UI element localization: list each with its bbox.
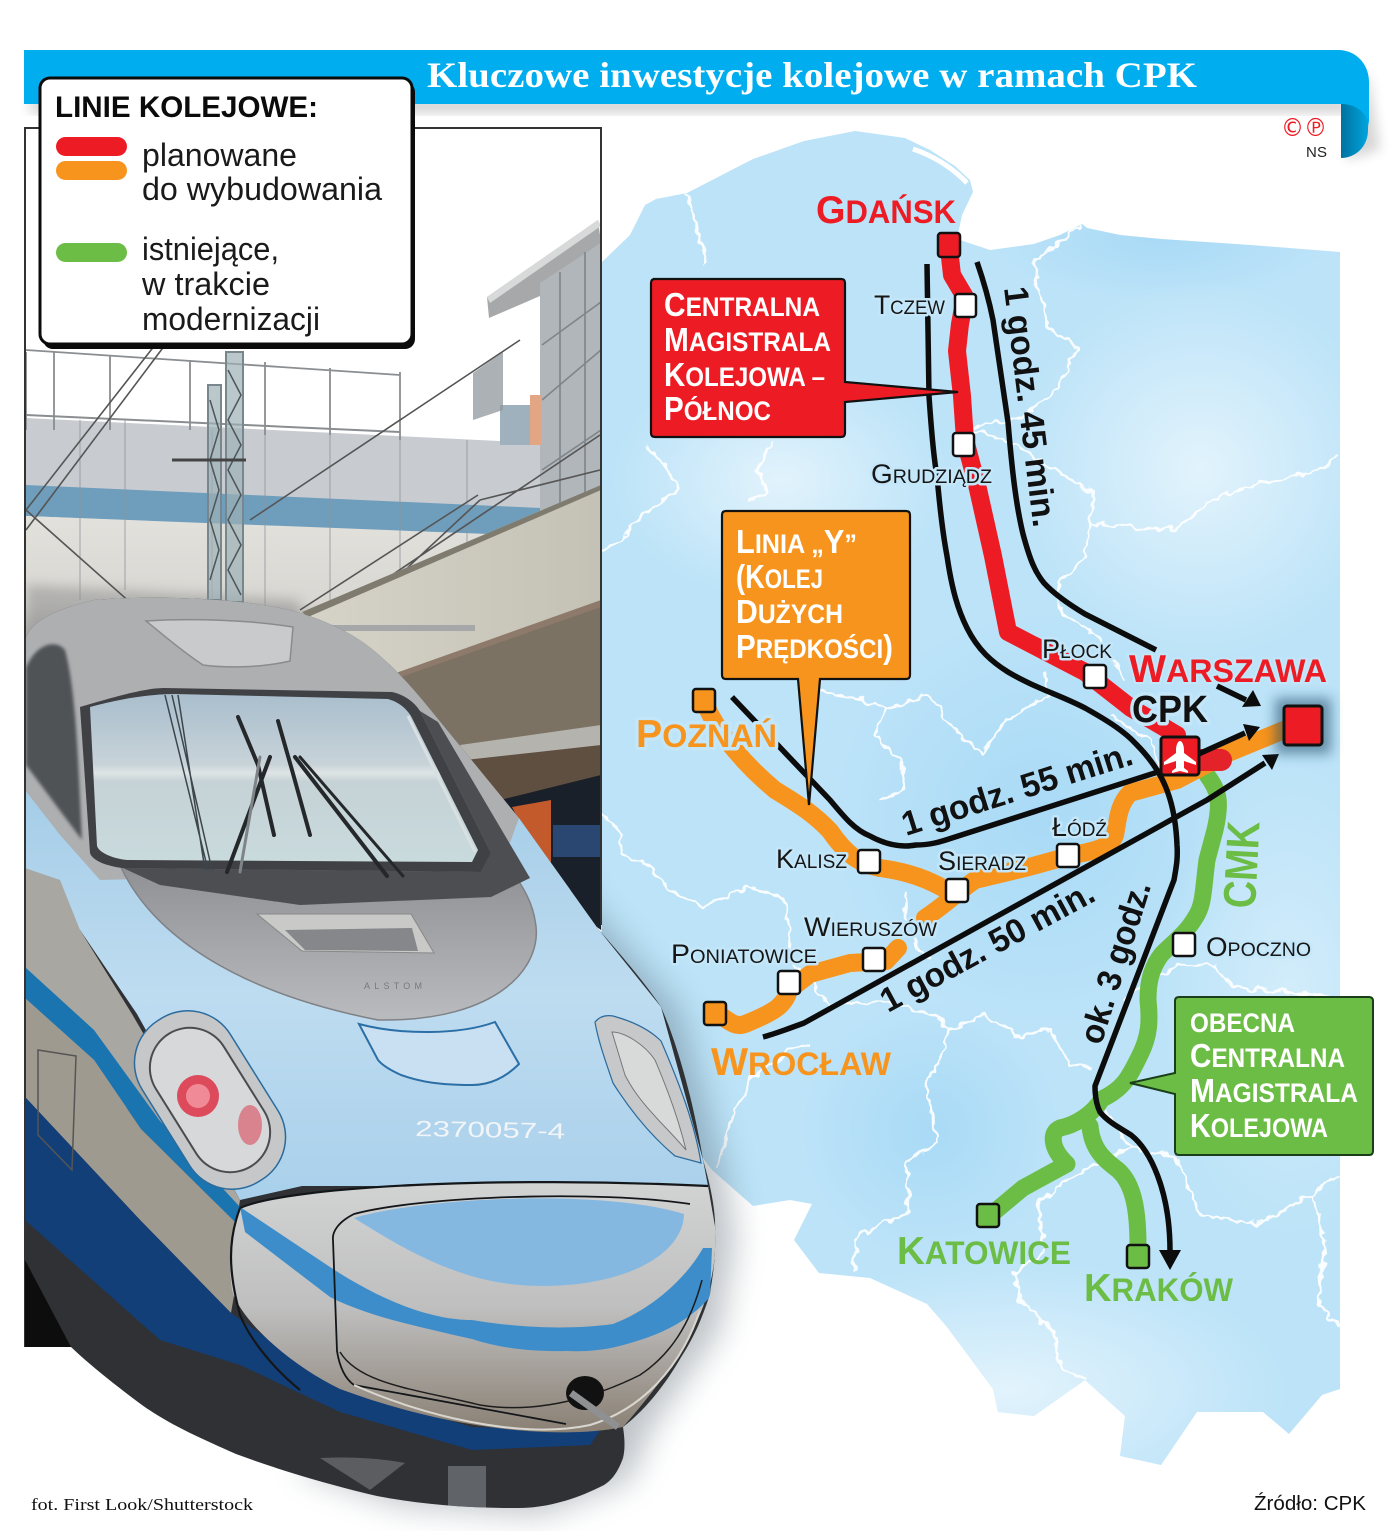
grey mask — [120, 850, 536, 1020]
number: 2370057-4 — [415, 1116, 565, 1144]
station: Płock — [1084, 665, 1106, 688]
callout: Centralna Magistrala Kolejowa - Północ: KOLEJOWA – — [664, 356, 825, 393]
station: Łódź — [1057, 844, 1079, 867]
station labels: Opoczno — [1206, 932, 1311, 962]
orange line Y — [708, 710, 1284, 1025]
swatch: green — [56, 243, 127, 262]
travel time: 1 godz. 50 min.: 1 godz. 50 min. — [874, 873, 1101, 1020]
city label: Wrocław: WROCŁAW — [711, 1041, 892, 1084]
red line CMK north — [949, 248, 1177, 735]
source: Źródło: CPK — [1254, 1492, 1367, 1515]
city label: Gdańsk: GDAŃSK — [816, 189, 956, 232]
callout: obecna Centralna Magistrala Kolejowa: CENTRALNA — [1190, 1037, 1345, 1074]
photo frame — [25, 128, 601, 1347]
photo credit: fot. First Look/Shutterstock — [31, 1495, 254, 1514]
station labels: Tczew — [874, 290, 945, 320]
city label: Kraków: KRAKÓW — [1084, 1267, 1234, 1310]
legend text: existing: istniejące, — [142, 231, 279, 267]
station: Wieruszów — [863, 948, 885, 971]
train — [20, 590, 716, 1508]
wipers — [227, 717, 403, 876]
map of Poland — [602, 131, 1340, 1465]
red stub past CPK — [1190, 749, 1232, 771]
callout: Centralna Magistrala Kolejowa - Północ: PÓŁNOC — [664, 390, 771, 427]
copyright marks: NS — [1306, 144, 1327, 161]
station: Tczew — [955, 294, 976, 317]
station labels: Poniatowice — [671, 939, 817, 969]
callout: Centralna Magistrala Kolejowa - Północ: MAGISTRALA — [664, 321, 831, 358]
callout: Linia Y: LINIA „Y” — [736, 523, 857, 560]
copyright marks — [1281, 113, 1327, 161]
callout: obecna Centralna Magistrala Kolejowa: MAGISTRALA — [1190, 1072, 1358, 1109]
callout: Centralna Magistrala Kolejowa - Północ — [651, 279, 958, 437]
legend text: existing — [141, 231, 320, 337]
legend panel — [40, 78, 415, 349]
windshield — [90, 694, 478, 862]
copyright marks: ©℗ — [1281, 113, 1327, 142]
callout: Centralna Magistrala Kolejowa - Północ: CENTRALNA — [664, 286, 820, 323]
station: Wrocław — [704, 1002, 726, 1025]
access hatch — [359, 1022, 519, 1085]
station: Warszawa with glow — [1275, 698, 1331, 754]
station: Poznań — [693, 689, 715, 712]
pylon — [172, 352, 246, 602]
legend text: planned: planowane — [142, 137, 297, 173]
station: Grudziądz — [953, 433, 974, 456]
station: Gdańsk — [938, 233, 960, 257]
skirt highlights — [320, 1457, 405, 1490]
travel time: ok. 3 godz.: ok. 3 godz. — [1072, 877, 1159, 1048]
travel route: Wrocław to Warszawa — [763, 754, 1279, 1037]
callout: Linia Y: (KOLEJ — [736, 558, 823, 595]
lamps — [134, 1010, 286, 1190]
legend text: planned: do wybudowania — [142, 171, 382, 207]
callout: Linia Y: PRĘDKOŚCI) — [736, 628, 893, 665]
dark band and pillar — [123, 711, 530, 905]
nose cap — [230, 1182, 716, 1432]
photo background: station — [26, 220, 601, 932]
legend text: planned — [142, 137, 382, 207]
legend text: existing: modernizacji — [142, 301, 320, 337]
callout: obecna Centralna Magistrala Kolejowa: OBECNA — [1190, 1008, 1295, 1038]
station labels: Łódź — [1052, 812, 1107, 842]
travel route: Gdańsk west line to Kraków — [927, 264, 1181, 1270]
station: Kalisz — [858, 850, 880, 873]
travel route: Gdańsk east line to Warszawa — [977, 262, 1261, 707]
callout: Linia Y — [722, 511, 910, 805]
title: Kluczowe inwestycje kolejowe w ramach CPK — [427, 55, 1197, 95]
hood body — [25, 790, 708, 1200]
station: Poniatowice — [778, 971, 800, 994]
green line CMK — [993, 775, 1218, 1246]
station: Kraków — [1127, 1245, 1149, 1268]
label: CPK: CPK — [1132, 689, 1209, 731]
train shadow — [300, 820, 735, 1515]
travel time: 1 godz. 55 min.: 1 godz. 55 min. — [897, 735, 1137, 844]
station labels: Płock — [1042, 634, 1112, 664]
station labels: Wieruszów — [804, 912, 937, 942]
label: CMK: CMK — [1213, 820, 1270, 910]
travel route: Poznań to Warszawa — [732, 697, 1260, 846]
city label: Katowice: KATOWICE — [897, 1230, 1071, 1273]
station labels: Grudziądz — [871, 459, 992, 489]
callout: obecna Centralna Magistrala Kolejowa — [1130, 997, 1373, 1155]
swatch: red — [56, 137, 127, 156]
swatch: orange — [56, 161, 127, 180]
coupler — [566, 1376, 604, 1410]
header ribbon — [24, 50, 1380, 160]
black corner under the photo — [25, 1260, 71, 1347]
station: Katowice — [977, 1204, 999, 1227]
station: Opoczno — [1173, 933, 1195, 956]
station labels: Sieradz — [938, 846, 1026, 876]
travel time: 1 godz. 45 min.: 1 godz. 45 min. — [996, 284, 1063, 529]
callout: Linia Y: DUŻYCH — [736, 593, 843, 630]
station: Sieradz — [946, 879, 968, 902]
legend title: LINIE KOLEJOWE: — [55, 91, 318, 124]
station labels — [671, 290, 1311, 969]
callout: obecna Centralna Magistrala Kolejowa: KOLEJOWA — [1190, 1107, 1328, 1144]
station labels: Kalisz — [776, 844, 847, 874]
legend text: existing: w trakcie — [141, 266, 270, 302]
city label: Warszawa: WARSZAWA — [1129, 648, 1327, 691]
Alstom mark: ALSTOM — [364, 981, 422, 991]
city label: Poznań: POZNAŃ — [636, 713, 777, 756]
canopy — [302, 485, 601, 673]
icon: CPK airport — [1161, 737, 1199, 775]
overhead wires — [26, 340, 600, 640]
